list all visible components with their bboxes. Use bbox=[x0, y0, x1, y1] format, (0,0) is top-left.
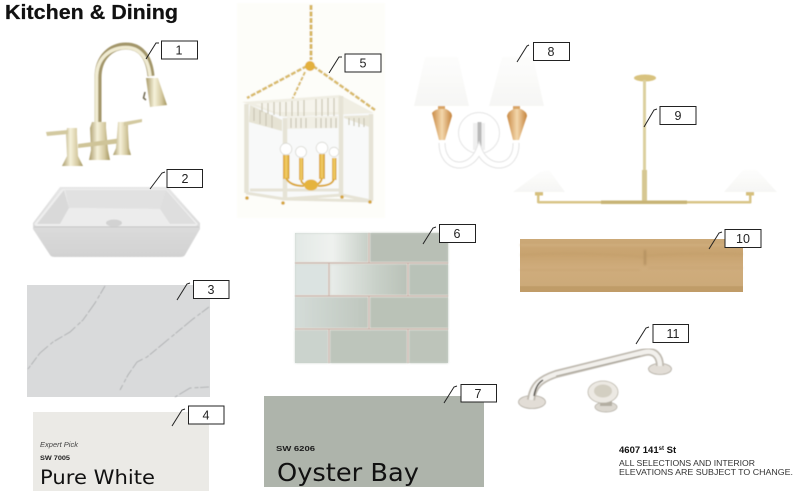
item 8: wall sconce bbox=[414, 57, 544, 165]
item 7: Oyster Bay paint swatch bbox=[264, 396, 484, 487]
address and disclaimer: ELEVATIONS ARE SUBJECT TO CHANGE. bbox=[619, 468, 793, 477]
address: St bbox=[664, 445, 677, 456]
label 4 bbox=[172, 406, 224, 426]
label 5 bbox=[329, 54, 381, 73]
label 1: 1 bbox=[176, 44, 183, 58]
label 8 bbox=[517, 42, 570, 62]
label 2: 2 bbox=[182, 172, 189, 186]
label 11 bbox=[636, 324, 688, 344]
item 3: quartz countertop bbox=[27, 285, 210, 397]
label 8: 8 bbox=[548, 45, 555, 59]
sink drain bbox=[106, 220, 122, 226]
paint code: SW 7005 bbox=[40, 456, 71, 462]
lantern candles bbox=[280, 61, 339, 190]
cabinet pull bbox=[518, 352, 672, 408]
label 5: 5 bbox=[360, 56, 367, 70]
item 6: glazed brick tile bbox=[295, 233, 448, 363]
paint name: Oyster Bay bbox=[277, 458, 419, 487]
label 1 bbox=[146, 41, 198, 59]
label 9: 9 bbox=[675, 109, 682, 123]
item 10: wood flooring bbox=[520, 239, 743, 292]
label 10 bbox=[709, 230, 761, 249]
address: 4607 141 bbox=[619, 445, 659, 456]
label 6: 6 bbox=[454, 227, 461, 241]
address: st bbox=[659, 446, 664, 452]
item 1: faucet bbox=[46, 46, 167, 166]
label 7: 7 bbox=[475, 387, 482, 401]
cabinet knob bbox=[588, 381, 618, 412]
item 4: Pure White paint swatch bbox=[33, 412, 209, 491]
label 11: 11 bbox=[667, 327, 680, 341]
item 5: lantern pendant bbox=[237, 3, 385, 218]
label 7 bbox=[444, 384, 496, 403]
label 2 bbox=[150, 170, 202, 189]
label 4: 4 bbox=[203, 408, 210, 422]
paint tag: Expert Pick bbox=[40, 442, 79, 449]
paint code: SW 6206 bbox=[276, 446, 315, 453]
label 3 bbox=[177, 280, 229, 300]
item 11: cabinet hardware bbox=[518, 352, 672, 412]
title: Kitchen & Dining bbox=[5, 2, 178, 24]
label 6 bbox=[423, 224, 476, 244]
paint name: Pure White bbox=[40, 466, 155, 489]
label 10: 10 bbox=[736, 232, 750, 246]
label 9 bbox=[644, 106, 696, 127]
disclaimer: ALL SELECTIONS AND INTERIOR bbox=[619, 459, 755, 468]
label 3: 3 bbox=[208, 283, 215, 297]
address and disclaimer bbox=[619, 445, 793, 477]
item 2: vessel sink bbox=[33, 187, 200, 257]
item 9: linear chandelier bbox=[513, 74, 777, 204]
